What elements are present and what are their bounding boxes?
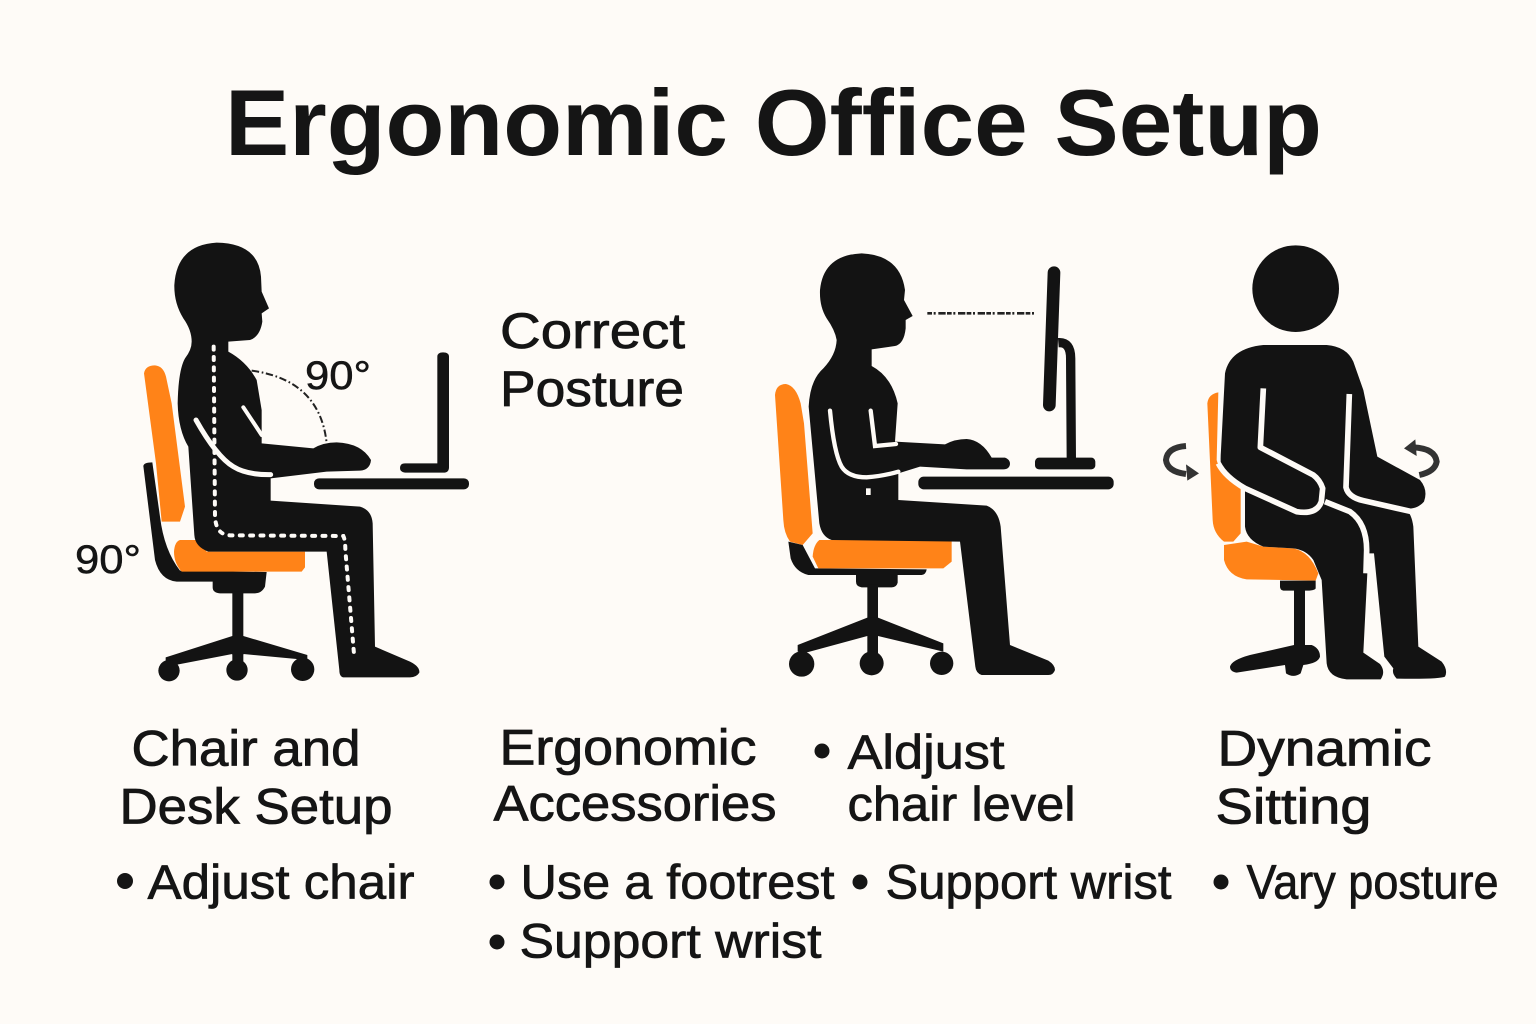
heading: ergonomic accessories: Accessories <box>494 776 776 832</box>
body silhouette <box>174 243 419 677</box>
bullet: adjust chair: Adjust chair <box>148 856 415 910</box>
chair base and wheels <box>789 585 953 677</box>
heading: ergonomic accessories: Ergonomic <box>500 720 756 776</box>
heading: chair and desk setup: Chair and <box>132 720 360 776</box>
spine and leg alignment dots <box>214 347 354 654</box>
chair base and wheels <box>158 592 314 681</box>
bullet: support wrist left: Support wrist <box>520 916 822 968</box>
heading: correct posture: Posture <box>500 361 684 417</box>
eye level line <box>927 309 1034 317</box>
label: hip 90 degrees: 90° <box>75 538 141 582</box>
figure: seated at monitor <box>775 253 1114 677</box>
heading: correct posture: Correct <box>500 303 685 359</box>
white arm outlines <box>196 407 271 475</box>
white arm outlines <box>830 411 898 477</box>
chair seat <box>813 540 952 568</box>
bullet: adjust chair level: chair level <box>848 778 1076 832</box>
rotation arrow left <box>1166 446 1199 481</box>
chair back <box>775 384 813 545</box>
desk <box>918 477 1114 489</box>
waist mark <box>866 488 871 495</box>
title: Ergonomic Office Setup <box>225 70 1322 175</box>
heading: dynamic sitting: Dynamic <box>1218 720 1432 776</box>
chair seat <box>174 540 305 572</box>
figure: dynamic sitting <box>1166 245 1446 679</box>
white arm and leg outlines <box>1218 388 1412 573</box>
heading: correct posture <box>500 303 685 417</box>
label: elbow 90 degrees: 90° <box>305 354 371 398</box>
bullet: use a footrest: Use a footrest <box>520 856 834 910</box>
bullet: vary posture: Vary posture <box>1246 856 1498 910</box>
desk <box>314 478 469 489</box>
heading: dynamic sitting <box>1216 720 1432 834</box>
monitor stand base <box>1035 458 1095 469</box>
chair frame and seat support <box>143 462 267 593</box>
heading: chair and desk setup <box>120 720 392 834</box>
head <box>1252 245 1339 332</box>
elbow angle arc <box>252 371 327 443</box>
chair frame <box>788 542 927 587</box>
bullet: adjust chair level <box>814 726 1076 832</box>
body silhouette <box>1221 345 1446 679</box>
figure: correct posture at laptop <box>143 243 469 681</box>
laptop <box>400 352 449 473</box>
chair back <box>1207 392 1241 542</box>
heading: chair and desk setup: Desk Setup <box>120 778 392 834</box>
body silhouette <box>809 253 1055 675</box>
heading: dynamic sitting: Sitting <box>1216 778 1372 834</box>
rotation arrow right <box>1404 439 1437 475</box>
monitor <box>1049 273 1071 460</box>
bullet: adjust chair level: Aldjust <box>848 726 1004 780</box>
heading: ergonomic accessories <box>494 720 776 832</box>
chair back <box>144 365 185 522</box>
chair seat <box>1224 542 1318 581</box>
bullet: support wrist right: Support wrist <box>886 856 1172 910</box>
chair base <box>1230 581 1320 676</box>
